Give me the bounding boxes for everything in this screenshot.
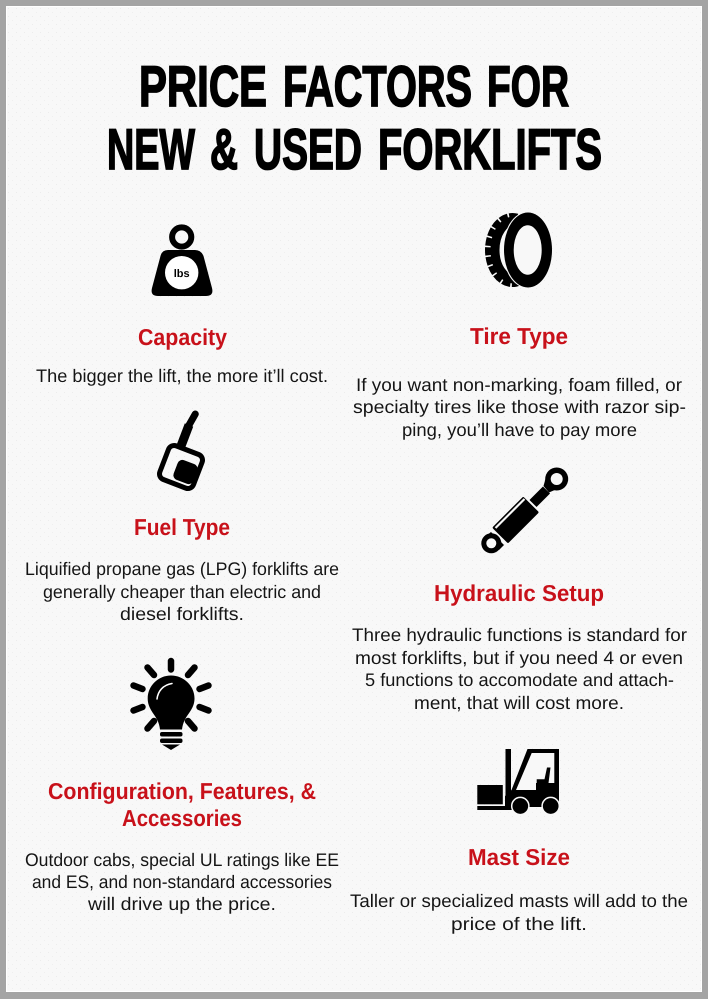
heading: hydraulic setup: Hydraulic Setup <box>434 580 604 606</box>
panel: mast size <box>350 749 688 934</box>
heading: configuration: Accessories <box>122 805 242 831</box>
text: tire type: ping, you’ll have to pay more <box>402 420 637 440</box>
panel: configuration <box>25 661 339 914</box>
panel: fuel type <box>25 414 339 624</box>
text: mast size <box>350 891 688 934</box>
text: tire type: specialty tires like those with razor sip- <box>353 397 686 417</box>
title: & <box>210 118 238 182</box>
title: FACTORS <box>283 55 472 119</box>
text: fuel type: generally cheaper than electric and <box>43 582 321 602</box>
icon: weight: lbs <box>174 268 190 280</box>
text: tire type <box>353 375 686 440</box>
icon: hydraulic cylinder <box>481 468 568 553</box>
text: hydraulic setup: Three hydraulic functions is standard for <box>352 625 687 645</box>
text: hydraulic setup: 5 functions to accomodate and attach- <box>365 670 674 690</box>
text: mast size: Taller or specialized masts will add to the <box>350 891 688 911</box>
heading: tire type: Tire Type <box>470 323 568 349</box>
icon: fuel nozzle <box>158 414 204 490</box>
text: configuration: will drive up the price. <box>87 894 276 914</box>
title: FORKLIFTS <box>378 118 602 182</box>
icon: weight <box>152 227 212 296</box>
text: mast size: price of the lift. <box>451 914 587 934</box>
heading: configuration <box>48 778 316 831</box>
text: fuel type <box>25 559 339 624</box>
heading: configuration: Configuration, Features, & <box>48 778 316 804</box>
text: configuration <box>25 850 339 914</box>
title: USED <box>254 118 362 182</box>
heading: capacity: Capacity <box>138 324 227 350</box>
heading: mast size: Mast Size <box>468 844 570 870</box>
text: hydraulic setup <box>352 625 687 713</box>
text: fuel type: diesel forklifts. <box>120 604 244 624</box>
text: fuel type: Liquified propane gas (LPG) forklifts are <box>25 559 339 579</box>
title: FOR <box>487 55 569 119</box>
text: tire type: If you want non-marking, foam filled, or <box>356 375 682 395</box>
title: PRICE <box>139 55 267 119</box>
icon: light bulb <box>134 661 208 750</box>
panel: hydraulic setup <box>352 468 687 713</box>
text: hydraulic setup: ment, that will cost more. <box>414 693 624 713</box>
icon: forklift <box>477 749 559 815</box>
panel: tire type <box>353 212 686 440</box>
text: configuration: and ES, and non-standard accessories <box>32 872 332 892</box>
title: NEW <box>107 118 195 182</box>
panel: capacity <box>36 227 328 386</box>
text: hydraulic setup: most forklifts, but if you need 4 or even <box>355 648 683 668</box>
title <box>107 55 602 182</box>
heading: fuel type: Fuel Type <box>134 514 230 540</box>
icon: tire <box>488 212 552 288</box>
text: configuration: Outdoor cabs, special UL ratings like EE <box>25 850 339 870</box>
text: capacity: The bigger the lift, the more it’ll cost. <box>36 366 328 386</box>
